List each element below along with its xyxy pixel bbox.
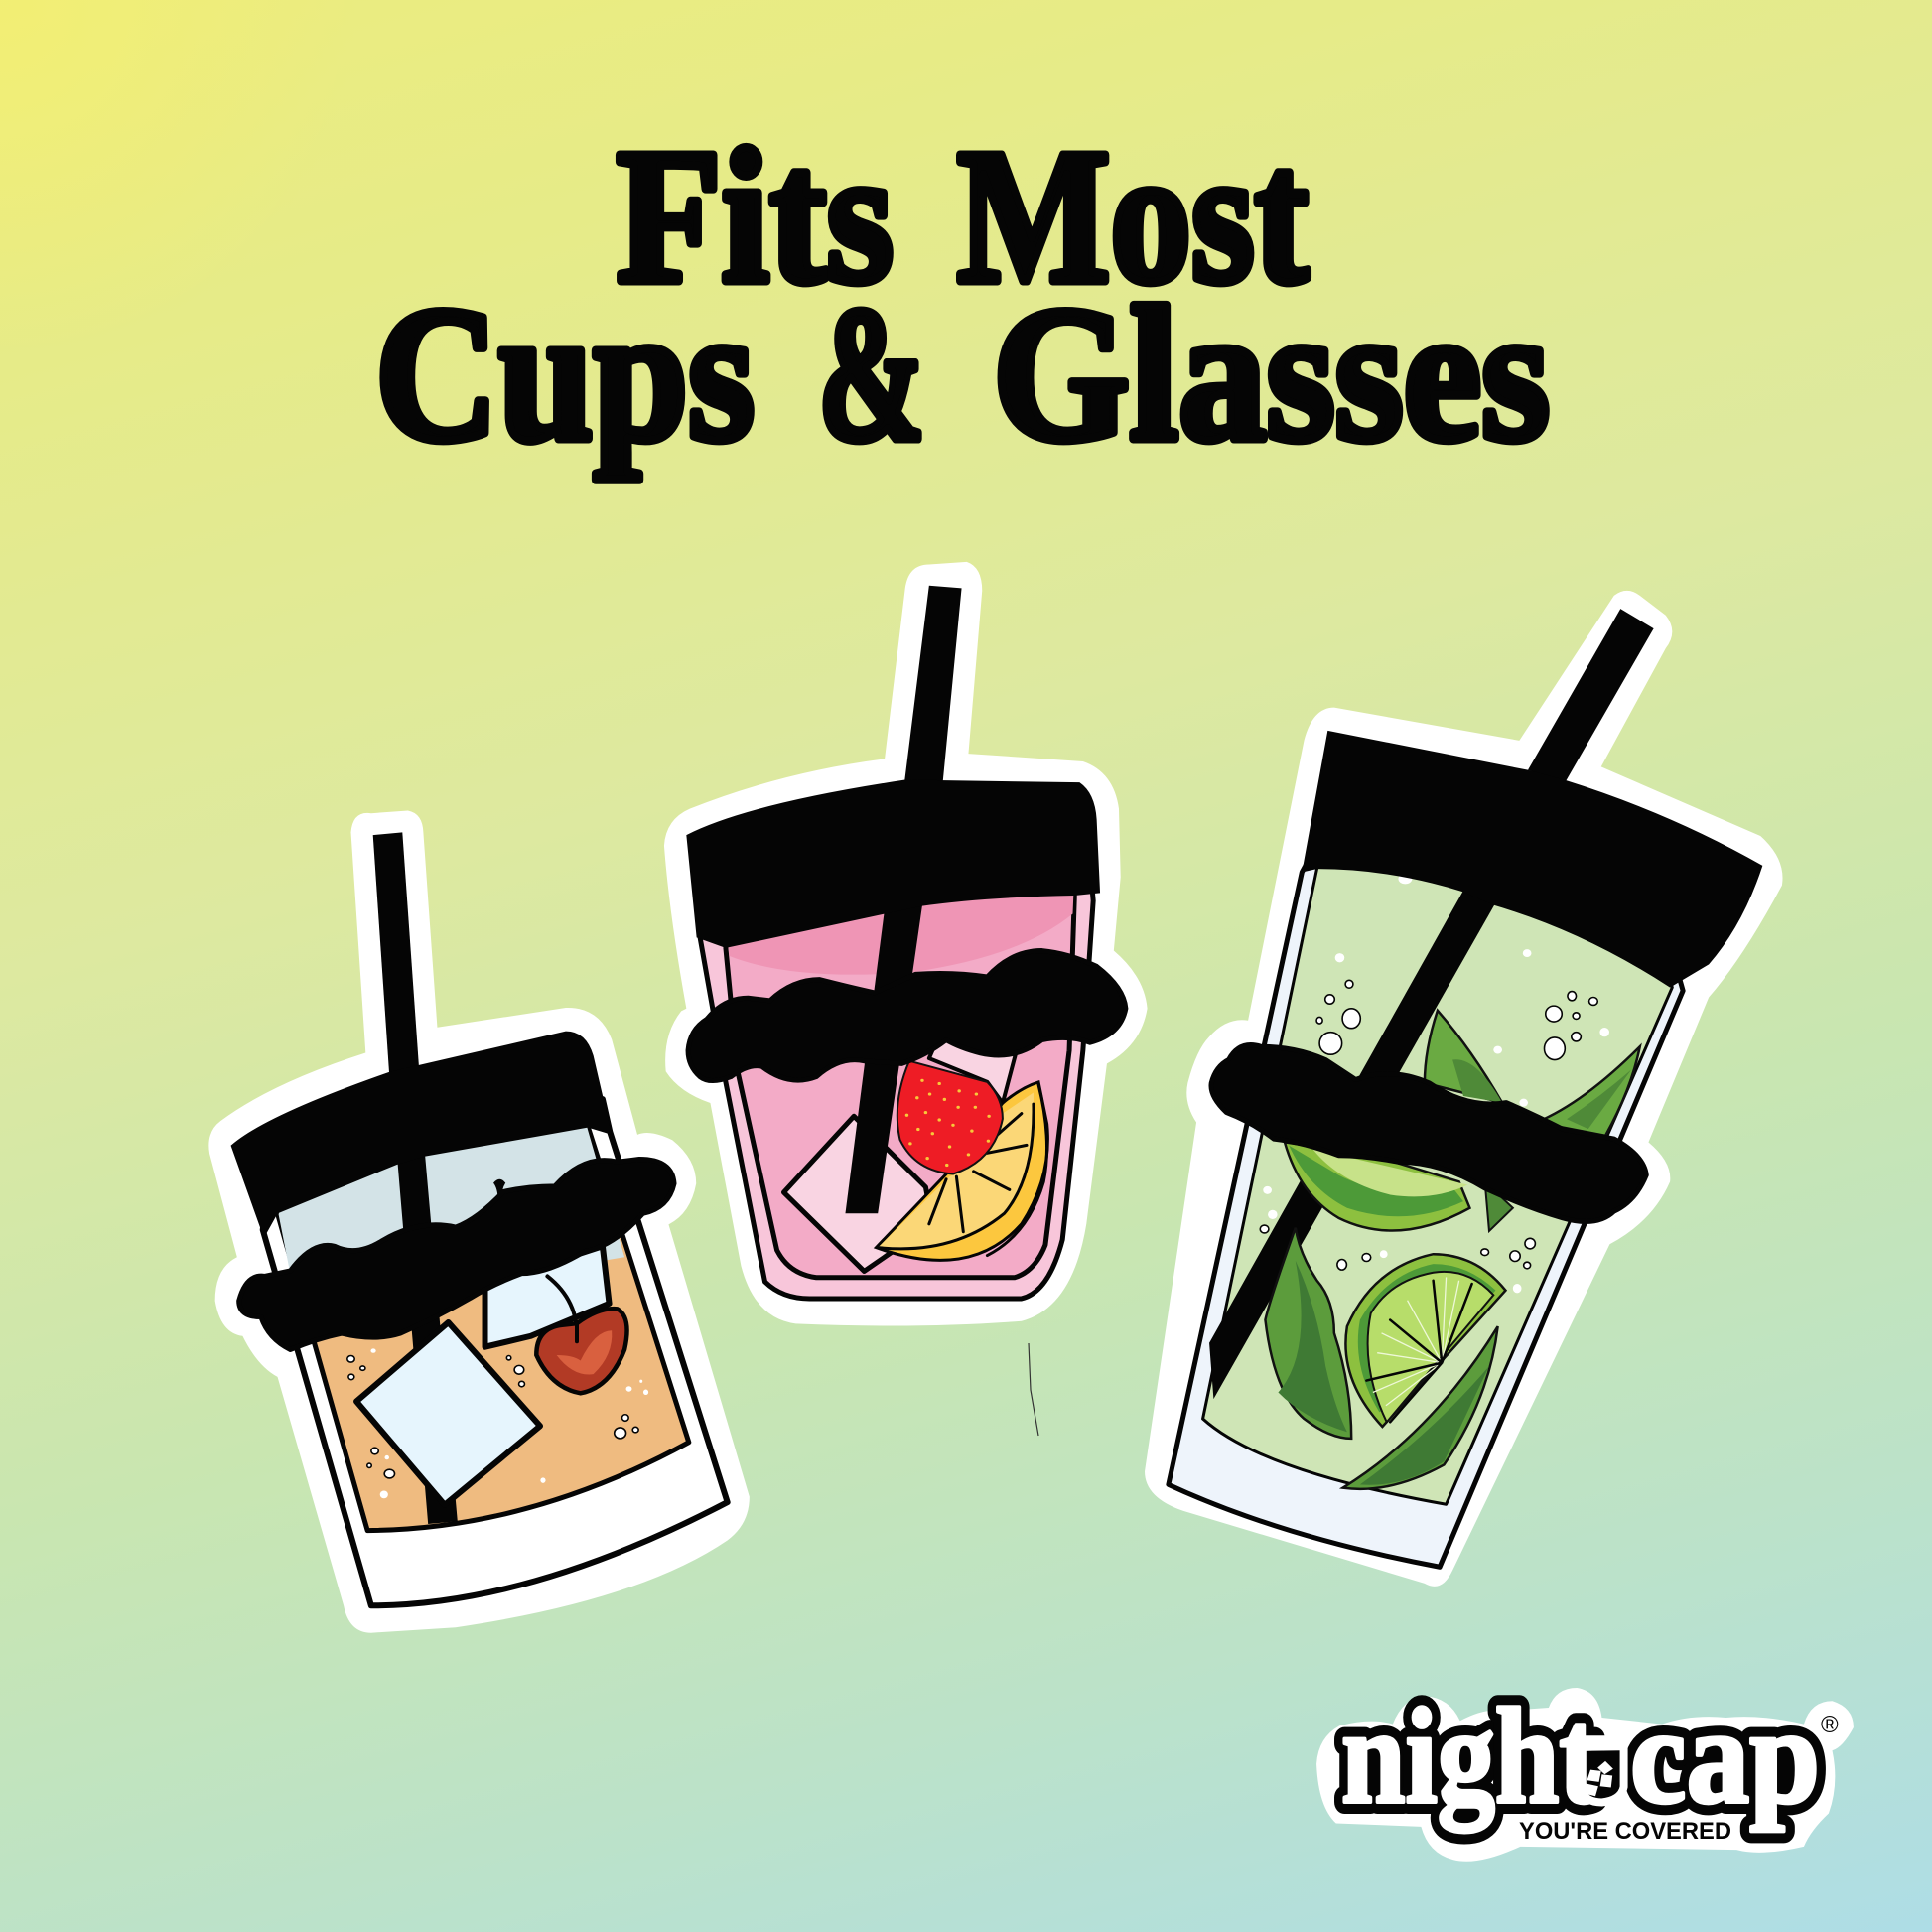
ice cube [783, 1116, 932, 1271]
cherry [536, 1276, 627, 1393]
straw top [1528, 609, 1654, 783]
straw inside glass [1209, 891, 1494, 1399]
leaf top [1425, 1011, 1502, 1103]
sticker border [208, 810, 750, 1633]
rear ice cube [485, 1246, 610, 1347]
leaf lower right [1343, 1326, 1498, 1489]
scrunchie [1211, 1045, 1646, 1221]
logo wordmark: night [1341, 1680, 1597, 1832]
title: Fits [617, 109, 894, 323]
glass top tint [279, 1099, 624, 1311]
lid [686, 780, 1100, 948]
logo sticker border [1316, 1688, 1854, 1862]
sticker border [1145, 591, 1783, 1587]
glass: pink lemonade [664, 562, 1148, 1325]
straw inside glass [845, 900, 923, 1213]
title: Cups [375, 267, 755, 481]
lime slice lower [1345, 1254, 1505, 1427]
logo wordmark [1341, 1680, 1820, 1832]
glass body [700, 862, 1093, 1299]
upper ice cube [929, 1019, 1025, 1103]
logo tagline: YOU'RE COVERED [1519, 1818, 1731, 1845]
logo wordmark: cap [1630, 1680, 1820, 1832]
logo wordmark: cap [1630, 1680, 1820, 1832]
drink [726, 872, 1074, 1278]
glass body [263, 1099, 728, 1605]
scrunchie [688, 951, 1126, 1081]
strawberry [897, 1061, 1003, 1174]
straw inside glass [397, 1149, 458, 1524]
bubbles [347, 1348, 648, 1498]
logo wordmark: night [1341, 1680, 1597, 1832]
straw top [373, 832, 419, 1077]
sticker border [664, 562, 1148, 1325]
lid [1302, 731, 1762, 988]
leaf lower left [1265, 1228, 1351, 1439]
cherry stem tip [493, 1179, 505, 1200]
drink [1203, 846, 1672, 1504]
drink surface band [727, 873, 1074, 975]
title: & [818, 267, 925, 481]
glass: whiskey with cherry [208, 810, 750, 1633]
glass body [1169, 853, 1683, 1567]
orange slice [876, 1082, 1047, 1260]
registered mark: ® [1821, 1712, 1839, 1738]
logo cup with ice [1576, 1735, 1630, 1803]
small leaf [1485, 1181, 1513, 1231]
lid [231, 1032, 612, 1238]
lime slice upper [1285, 1142, 1469, 1231]
front ice cube [356, 1322, 540, 1505]
logo: nightcap [1316, 1680, 1854, 1862]
title [375, 109, 1550, 481]
title: Most [957, 109, 1309, 323]
drink [278, 1099, 689, 1531]
bubbles [1260, 874, 1609, 1293]
stray line [1029, 1343, 1038, 1436]
glass: mojito [1145, 591, 1783, 1587]
title: Glasses [993, 267, 1550, 481]
scrunchie [239, 1159, 674, 1349]
leaf right [1537, 1046, 1640, 1136]
straw top [904, 586, 962, 785]
